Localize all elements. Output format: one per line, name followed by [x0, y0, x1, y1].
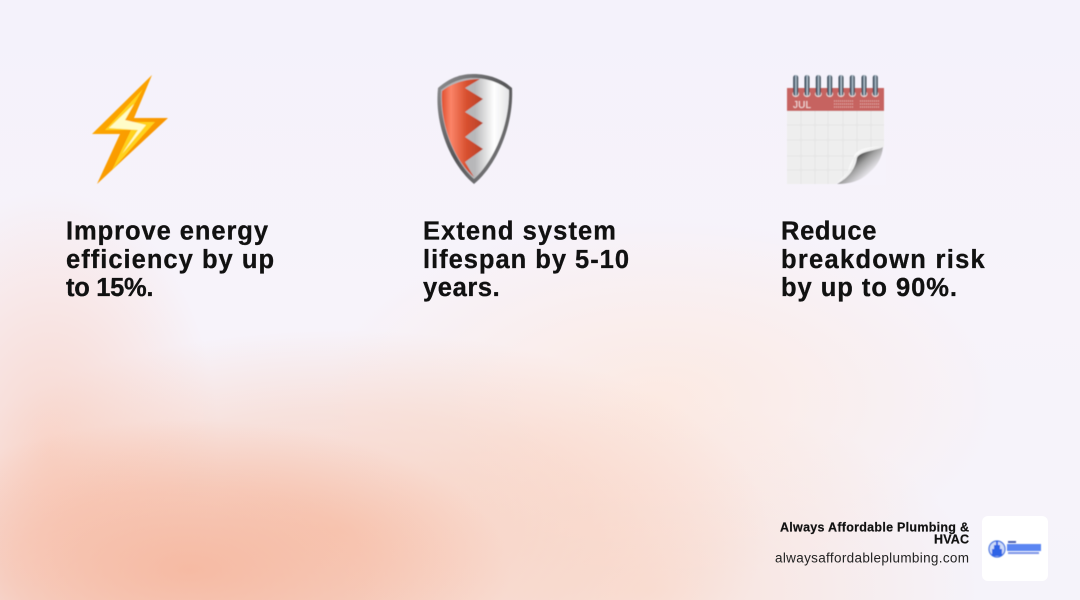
- text: system lifespan: lifespan by 5-10: [423, 246, 630, 274]
- brand name: [780, 521, 969, 547]
- text: energy efficiency: efficiency by up: [66, 246, 275, 274]
- text: energy efficiency: Improve energy: [66, 218, 269, 246]
- logo card: [982, 516, 1048, 581]
- text: system lifespan: Extend system: [423, 218, 617, 246]
- brand name: HVAC: [934, 533, 969, 547]
- icon: shield: [437, 74, 512, 184]
- logo mark: [989, 541, 1041, 557]
- spiral rings: [792, 75, 879, 97]
- text: energy efficiency: to 15%.: [66, 274, 153, 302]
- text: breakdown risk: breakdown risk: [781, 246, 986, 274]
- icon: lightning bolt: [92, 75, 168, 184]
- calendar header: [787, 88, 884, 111]
- month label: JUL: [793, 100, 811, 111]
- text: breakdown risk: Reduce: [781, 218, 877, 246]
- mini month dots: [834, 101, 880, 107]
- brand name: Always Affordable Plumbing &: [780, 521, 969, 535]
- text: system lifespan: years.: [423, 274, 500, 302]
- page curl: [836, 146, 886, 185]
- text: energy efficiency: [66, 218, 275, 302]
- calendar grid: [787, 111, 884, 184]
- calendar page: [787, 111, 884, 184]
- icon: calendar: [787, 75, 886, 185]
- text: breakdown risk: [781, 218, 986, 302]
- text: breakdown risk: by up to 90%.: [781, 274, 958, 302]
- text: system lifespan: [423, 218, 630, 302]
- website: alwaysaffordableplumbing.com: [775, 550, 969, 565]
